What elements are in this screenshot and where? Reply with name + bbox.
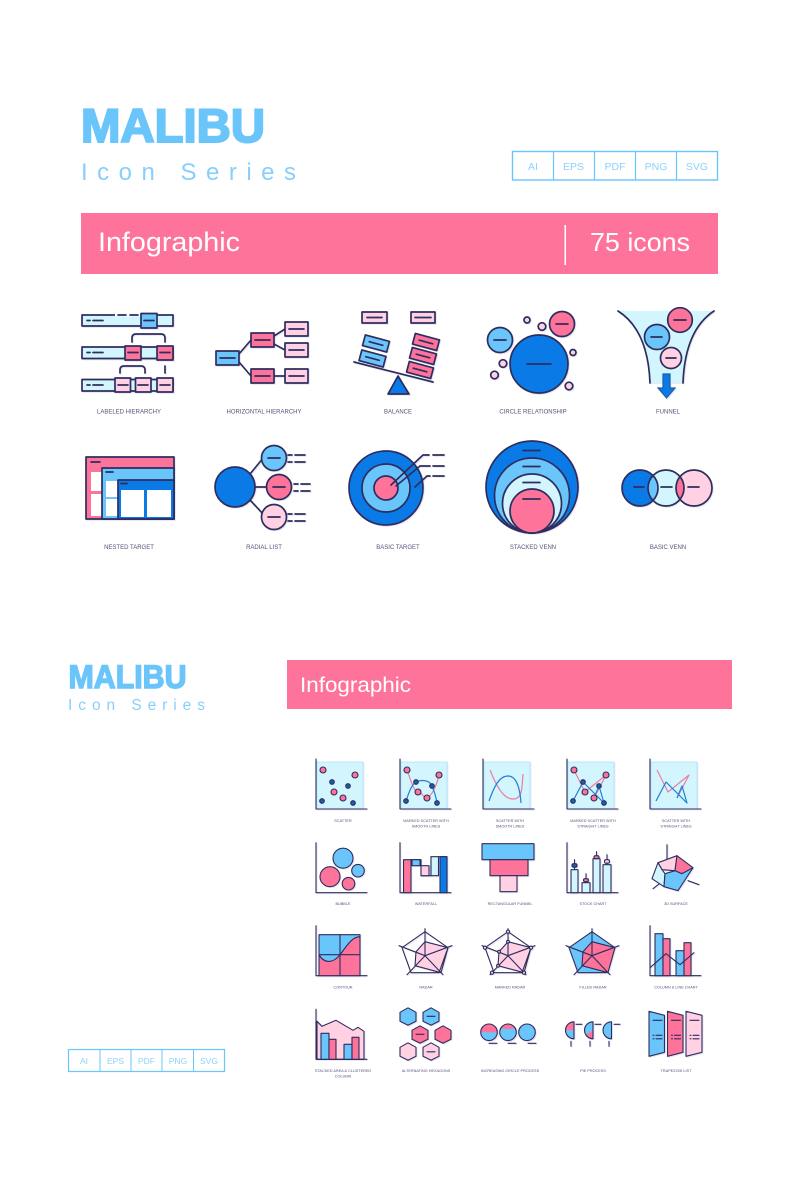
format badges top: PDF [604,161,626,173]
label: scatter with smooth lines: SMOOTH LINES [496,824,525,828]
label: increasing circle process: INCREASING CIRCLE PROCESS [481,1069,540,1073]
label: marked scatter with smooth lines: MARKED SCATTER WITH [403,819,449,823]
banner: Infographic 75 icons [81,213,718,274]
icon: bubble [316,843,367,893]
icon: marked scatter with straight lines [567,759,618,809]
subtitle: Icon Series: Icon Series [81,159,296,186]
label: 3D surface: 3D SURFACE [664,902,688,906]
format badges bottom: AI [80,1056,88,1066]
label: stacked area and clustered column: COLUMN [335,1074,351,1078]
icon: pie process [566,1022,620,1046]
label: trapezoid list: TRAPEZOID LIST [661,1069,692,1073]
icon: labeled hierarchy [82,314,173,392]
icon: stacked venn [486,441,578,533]
label: waterfall: WATERFALL [415,902,437,906]
label: circle relationship: CIRCLE RELATIONSHIP [499,410,567,416]
icon: basic venn [622,470,712,506]
icon: circle relationship [488,312,576,393]
icon: column and line chart [650,926,701,976]
icon: filled radar [566,929,619,975]
lower banner: Infographic: Infographic [300,673,411,697]
icon: balance [354,312,439,394]
label: stock chart: STOCK CHART [579,902,607,906]
icon: scatter [316,759,367,809]
label: bubble: BUBBLE [336,902,351,906]
icon: contour [316,926,367,976]
icon: stock chart [567,843,618,893]
label: scatter with straight lines: SCATTER WITH [662,819,690,823]
icon: scatter with smooth lines [483,759,534,809]
lower title: MALIBU: MALIBU [68,659,186,695]
label: labeled hierarchy: LABELED HIERARCHY [97,410,161,416]
icon: rectangular funnel [482,844,534,892]
label: rectangular funnel: RECTANGULAR FUNNEL [488,902,532,906]
icon: increasing circle process [481,1024,536,1043]
format badges bottom: PDF [138,1056,155,1066]
icon: alternating hexagons [400,1008,451,1060]
icon: radial list [215,446,310,530]
format badges top: PNG [645,161,667,173]
label: alternating hexagons: ALTERNATING HEXAGONS [402,1069,451,1073]
label: nested target: NESTED TARGET [104,545,154,551]
icon: 3D surface [652,845,699,891]
label: horizontal hierarchy: HORIZONTAL HIERARCHY [226,410,302,416]
format badges top: SVG [686,161,708,173]
icon: trapezoid list [649,1011,702,1056]
icon: stacked area and clustered column [316,1009,367,1059]
label: scatter with straight lines: STRAIGHT LINES [660,824,692,828]
format badges top: AI [528,161,538,173]
label: basic target: BASIC TARGET [376,545,420,551]
label: marked scatter with straight lines: MARKED SCATTER WITH [570,819,616,823]
label: marked scatter with smooth lines: SMOOTH LINES [412,824,441,828]
lower banner: Infographic [287,660,732,709]
format badges bottom [68,1050,224,1072]
format badges bottom: EPS [107,1056,124,1066]
format badges top: EPS [563,161,584,173]
label: radar: RADAR [419,986,433,990]
icon: radar [399,929,452,975]
label: radial list: RADIAL LIST [246,545,282,551]
icon: marked radar [482,929,535,975]
icon: funnel [618,308,714,398]
label: scatter: SCATTER [334,819,352,823]
format badges bottom: SVG [200,1056,218,1066]
icon: nested target [86,457,174,519]
format badges top [512,152,718,180]
label: pie process: PIE PROCESS [580,1069,606,1073]
icon: waterfall [400,843,451,893]
banner: Infographic 75 icons: Infographic [98,227,240,257]
label: column and line chart: COLUMN & LINE CHART [654,986,698,990]
label: marked radar: MARKED RADAR [495,986,526,990]
label: contour: CONTOUR [333,986,353,990]
label: scatter with smooth lines: SCATTER WITH [496,819,524,823]
icon: horizontal hierarchy [216,322,308,383]
label: filled radar: FILLED RADAR [579,986,607,990]
icon: basic target [349,451,444,525]
label: marked scatter with straight lines: STRAIGHT LINES [577,824,609,828]
label: stacked area and clustered column: STACKED AREA & CLUSTERED [315,1069,371,1073]
title: MALIBU: MALIBU [81,99,265,152]
label: funnel: FUNNEL [656,410,681,416]
icon: marked scatter with smooth lines [400,759,451,809]
label: stacked venn: STACKED VENN [510,545,556,551]
label: balance: BALANCE [384,410,412,416]
format badges bottom: PNG [169,1056,187,1066]
label: basic venn: BASIC VENN [650,545,686,551]
lower subtitle: Icon Series: Icon Series [68,697,205,714]
icon: scatter with straight lines [650,759,701,809]
banner: Infographic 75 icons: 75 icons [590,227,690,257]
